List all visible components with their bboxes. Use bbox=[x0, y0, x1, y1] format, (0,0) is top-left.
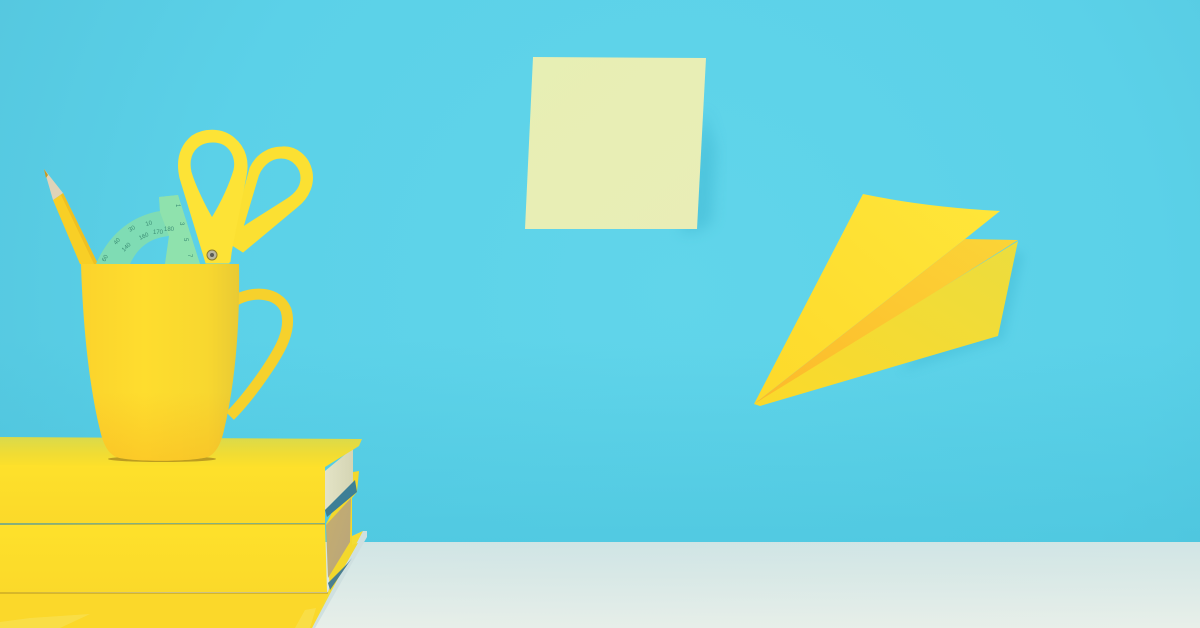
mug with handle bbox=[81, 264, 288, 462]
top book bbox=[0, 437, 362, 524]
protractor: 170 bbox=[153, 230, 164, 236]
scissors bbox=[178, 130, 312, 263]
plane inner fold bbox=[754, 239, 1018, 404]
scissors right handle bbox=[230, 147, 312, 262]
mug contact shadow bbox=[108, 456, 216, 462]
bottom book bbox=[0, 531, 367, 628]
protractor: 7 bbox=[186, 254, 192, 258]
protractor: 1 bbox=[174, 204, 180, 208]
protractor bbox=[96, 195, 200, 264]
protractor: 30 bbox=[128, 225, 137, 234]
protractor: 5 bbox=[182, 238, 188, 242]
protractor: 3 bbox=[178, 222, 184, 226]
protractor: 160 bbox=[138, 232, 151, 242]
paper plane bbox=[754, 194, 1024, 406]
plane upper wing bbox=[754, 194, 1000, 404]
protractor: 40 bbox=[113, 237, 122, 246]
stack of yellow books bbox=[0, 437, 367, 628]
plane lower wing bbox=[754, 241, 1018, 406]
scissors pivot screw bbox=[207, 250, 217, 260]
protractor: 140 bbox=[121, 242, 133, 253]
scissors left handle bbox=[178, 130, 247, 263]
protractor: 180 bbox=[164, 227, 175, 233]
pencil bbox=[44, 169, 98, 264]
mug body bbox=[81, 264, 239, 461]
protractor: 10 bbox=[145, 220, 154, 228]
protractor: 60 bbox=[101, 254, 110, 263]
middle book bbox=[0, 471, 359, 593]
mug handle bbox=[230, 294, 288, 416]
desk surface bbox=[0, 542, 1200, 628]
sticky note bbox=[525, 57, 716, 232]
